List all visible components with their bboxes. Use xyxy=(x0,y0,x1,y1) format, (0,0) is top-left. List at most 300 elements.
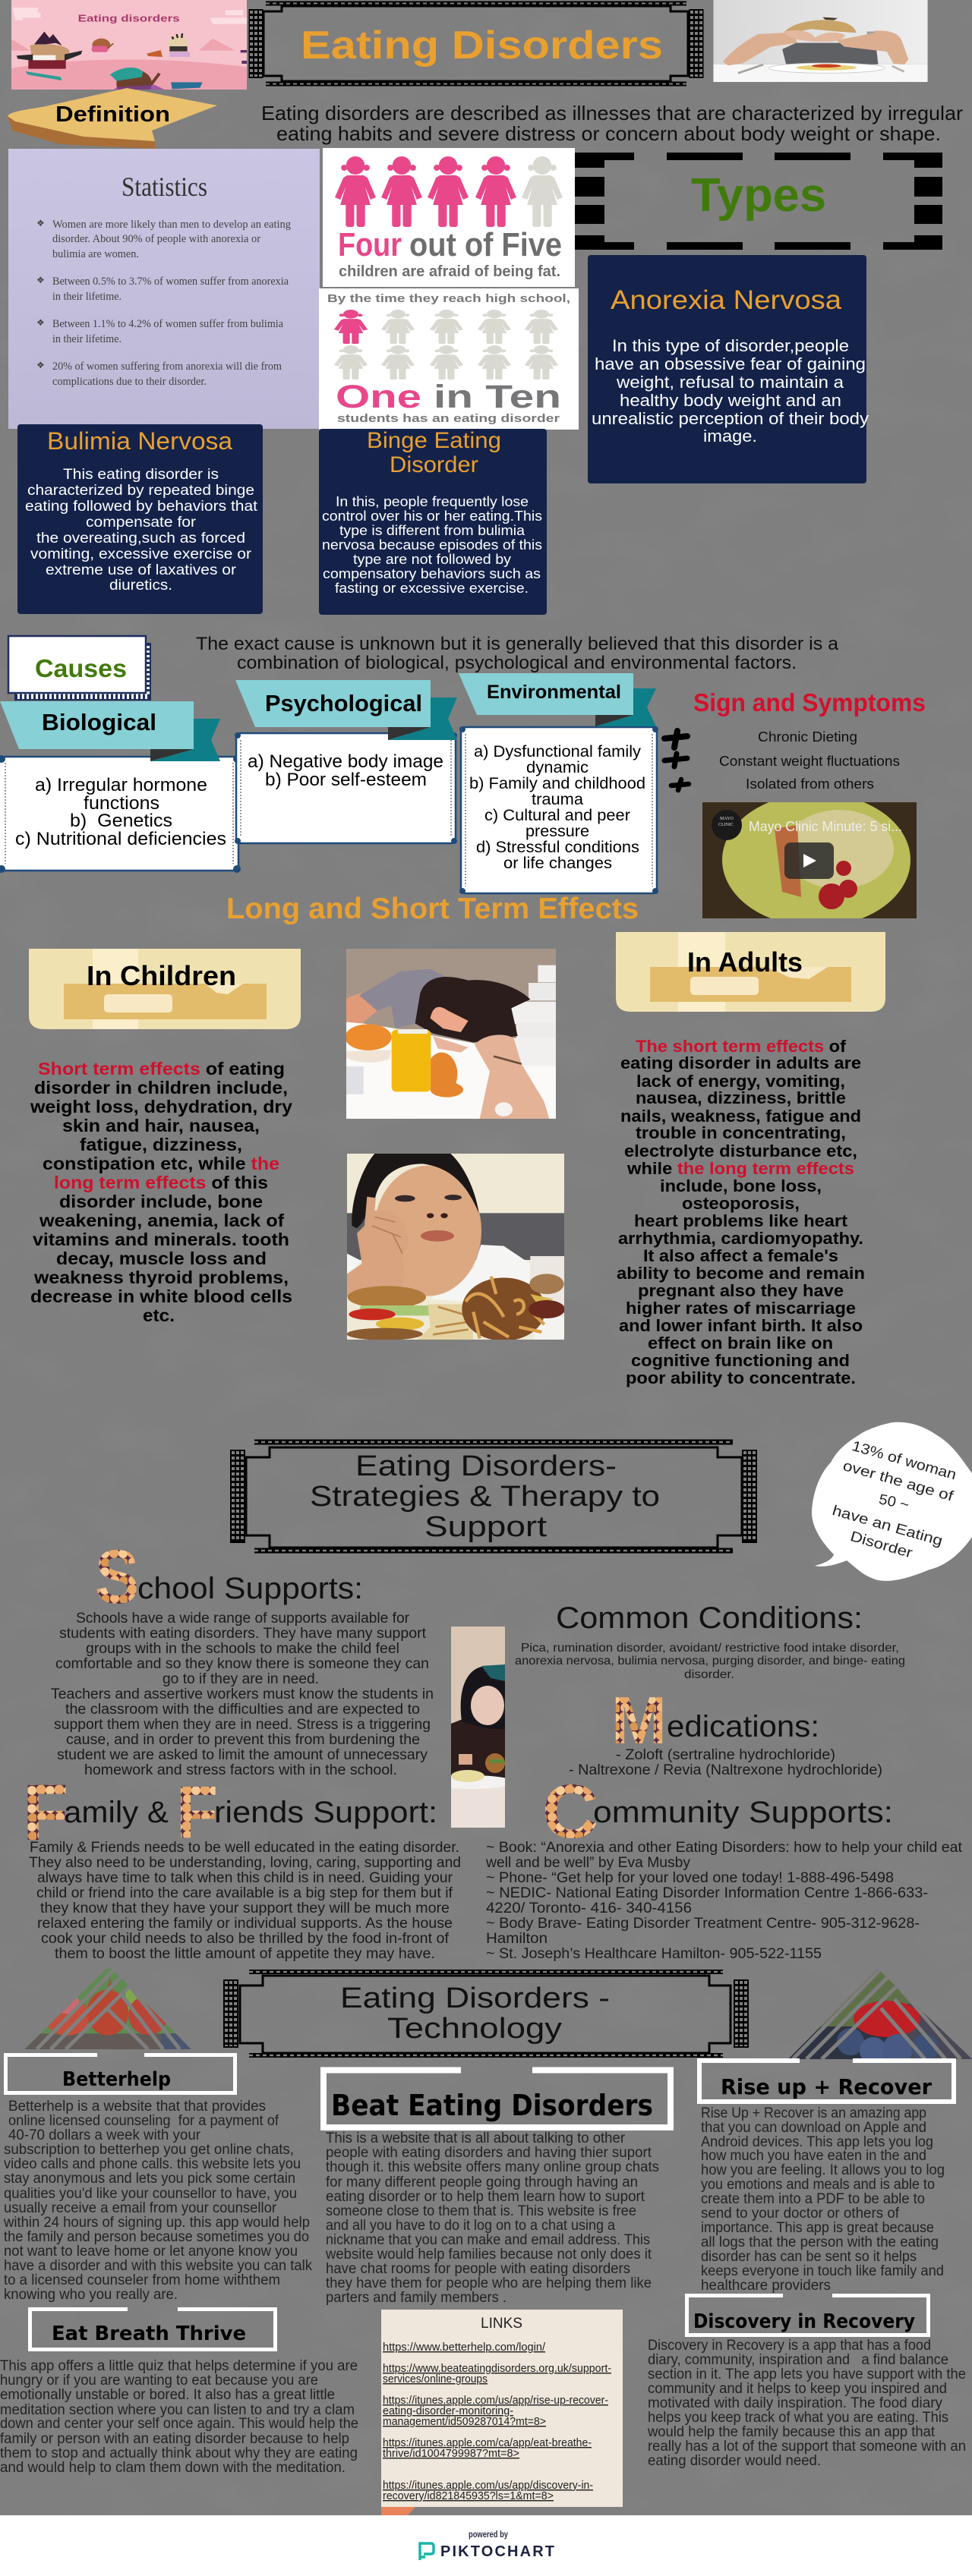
callout: speech bubble: over the age of xyxy=(841,1458,955,1505)
text: environmental factors: b) Family and childhood xyxy=(469,775,645,792)
photo: woman with burger xyxy=(451,1627,505,1828)
text: effects in children xyxy=(30,1059,292,1325)
bullet list: ❖ xyxy=(36,360,45,370)
text: school supports: homework and stress factors with in the school. xyxy=(84,1762,397,1778)
image: cartoon eating disorders: Eating disorders xyxy=(78,13,180,24)
panel: four out of five xyxy=(323,148,575,287)
causes badge xyxy=(8,636,150,700)
pictogram row xyxy=(335,156,563,227)
text: psychological factors: a) Negative body image xyxy=(248,751,443,772)
text: eat breath thrive xyxy=(0,2358,358,2476)
text: psychological factors xyxy=(248,751,443,790)
text: beat eating disorders: This is a website that is all about talking to other xyxy=(326,2130,626,2146)
banner: in children xyxy=(29,949,301,1029)
link list: https://itunes.apple.com/ca/app/eat-breathe- xyxy=(383,2437,592,2449)
text: school supports: the classroom with the difficulties and are expected to xyxy=(65,1702,420,1718)
text: effects in adults: nausea, dizziness, brittle xyxy=(636,1088,846,1107)
pictogram grid xyxy=(334,310,558,379)
text: discovery in recovery: Discovery in Recovery is a app that has a food xyxy=(648,2338,931,2354)
box title: discovery in recovery xyxy=(686,2295,928,2335)
text: biological factors: functions xyxy=(84,793,159,814)
triangle image: apples xyxy=(24,1969,191,2049)
text: school supports: comfortable and so they know there is someone they can xyxy=(55,1656,429,1672)
bullet list: in their lifetime. xyxy=(52,291,122,303)
text: medications: - Naltrexone / Revia (Naltrexone hydrochloride) xyxy=(569,1762,882,1778)
text: rise up and recover: how much you have eaten in the and xyxy=(701,2148,926,2164)
bullet list: Women are more likely than men to develop an eating xyxy=(52,219,291,231)
strategies frame xyxy=(233,1442,754,1551)
bullet list: ❖ xyxy=(36,275,45,285)
text: effects in children: skin and hair, nausea, xyxy=(62,1116,260,1135)
link list xyxy=(383,2341,611,2502)
text: school supports: students with eating disorders. They have many support xyxy=(59,1626,427,1642)
definition badge: Definition xyxy=(55,102,170,127)
panel: bulimia nervosa: Bulimia Nervosa xyxy=(47,427,232,455)
panel: bulimia nervosa: vomiting, excessive exercise or xyxy=(30,546,252,562)
bullet list: ❖ xyxy=(36,317,45,328)
text: betterhelp: have a disorder and with this website you can talk xyxy=(4,2258,312,2274)
panel: bulimia nervosa: the overeating,such as forced xyxy=(36,530,245,546)
panel: links: LINKS xyxy=(481,2316,522,2332)
panel: anorexia nervosa: healthy body weight and an xyxy=(620,391,841,410)
text: common conditions: anorexia nervosa, bulimia nervosa, purging disorder, and binge- eating xyxy=(515,1655,905,1667)
text: betterhelp: usually receive a email from your counsellor xyxy=(4,2200,277,2216)
heading: family and friends support: F xyxy=(176,1771,218,1853)
text: family and friends: they know that they have your support they will be much more xyxy=(40,1901,450,1916)
text: effects in adults: eating disorder in adults are xyxy=(620,1053,861,1072)
text: family and friends: always have time to talk when this child is in need. Guiding your xyxy=(37,1870,453,1886)
link list: https://itunes.apple.com/us/app/discovery-in- xyxy=(383,2480,593,2492)
card: psychological xyxy=(235,680,457,844)
bullet list: complications due to their disorder. xyxy=(52,376,207,388)
panel: one in ten xyxy=(319,288,579,430)
heading: community supports xyxy=(542,1769,893,1854)
callout: speech bubble xyxy=(812,1422,972,1581)
text: effects in adults: It also affect a female's xyxy=(643,1246,838,1265)
panel: one in ten: By the time they reach high school, xyxy=(327,292,570,305)
text: environmental factors: or life changes xyxy=(503,855,612,872)
text: psychological factors: b) Poor self-esteem xyxy=(265,770,427,790)
box title: rise up and recover xyxy=(699,2061,954,2102)
callout: speech bubble: 13% of woman xyxy=(850,1438,958,1483)
ribbon: environmental: Environmental xyxy=(487,682,621,703)
text: community supports: well and be well” by Eva Musby xyxy=(485,1855,690,1871)
text: effects in children: long term effects of this xyxy=(54,1173,268,1192)
text: effects in children: decrease in white blood cells xyxy=(30,1286,292,1306)
bullet list: bulimia are women. xyxy=(52,248,139,260)
panel: links xyxy=(381,2310,623,2515)
card: biological xyxy=(0,701,241,873)
text: effects in adults: pregnant also they have xyxy=(638,1281,844,1300)
heading: strategies and therapy: Strategies & Therapy to xyxy=(310,1481,660,1513)
text: effects in adults: osteoporosis, xyxy=(682,1194,800,1213)
footer: powered by piktochart xyxy=(0,2515,972,2576)
symptoms list xyxy=(664,729,900,792)
panel: anorexia nervosa xyxy=(588,255,869,483)
banner: in children: In Children xyxy=(87,960,236,991)
text: beat eating disorders: eating disorder or to help them learn how to suport xyxy=(326,2189,645,2205)
text: discovery in recovery: section in it. The app lets you have support with the xyxy=(648,2367,966,2382)
panel: one in ten: One xyxy=(336,379,421,415)
text: beat eating disorders: for many different people going through having an xyxy=(326,2174,638,2190)
text: rise up and recover: healthcare providers xyxy=(701,2278,831,2294)
video thumbnail: CLINIC xyxy=(718,823,734,827)
text: environmental factors: pressure xyxy=(525,823,589,840)
text: discovery in recovery: motivated with daily inspiration. The food diary xyxy=(648,2395,942,2411)
text: beat eating disorders xyxy=(325,2130,659,2306)
text: rise up and recover: send to your doctor or others of xyxy=(701,2206,900,2222)
text: rise up and recover: Rise Up + Recover is an amazing app xyxy=(701,2105,926,2121)
text: rise up and recover: create them into a PDF to be able to xyxy=(701,2191,925,2207)
text: family and friends: child or friend into the care available is a big step for them but if xyxy=(36,1885,453,1901)
heading: medications: edications: xyxy=(667,1710,819,1743)
text: rise up and recover: importance. This app is great because xyxy=(701,2220,934,2236)
title frame xyxy=(251,3,701,83)
symptoms list: Isolated from others xyxy=(746,776,874,792)
text: beat eating disorders: and all you have to do it log on to a chat using a xyxy=(326,2218,615,2234)
text: effects in children: decay, muscle loss and xyxy=(56,1249,267,1268)
text: discovery in recovery: diary, community, inspiration and a find balance xyxy=(648,2352,948,2368)
panel: bulimia nervosa: extreme use of laxatives or xyxy=(46,562,237,578)
panel: binge eating disorder: Disorder xyxy=(390,452,478,477)
box title: eat breath thrive xyxy=(30,2309,275,2350)
text: family and friends xyxy=(29,1840,461,1962)
text: beat eating disorders: they have them for people who are helping them like xyxy=(326,2275,652,2291)
box title: eat breath thrive: Eat Breath Thrive xyxy=(52,2322,246,2345)
panel: bulimia nervosa: characterized by repeated binge xyxy=(27,482,254,499)
text: common conditions xyxy=(515,1642,905,1681)
text: betterhelp: to a licensed counseler from home withthem xyxy=(4,2272,280,2288)
link list: management/id509287014?mt=8> xyxy=(383,2416,546,2428)
panel: anorexia nervosa: unrealistic perception of their body xyxy=(592,409,869,428)
text: rise up and recover: how you are feeling. It allows you to log xyxy=(701,2162,945,2178)
text: family and friends: relaxed entering the family or individual supports. As the house xyxy=(37,1916,453,1932)
text: family and friends: They also need to be understanding, loving, caring, supporting and xyxy=(29,1855,461,1871)
text: family and friends: Family & Friends needs to be well educated in the eating disorder. xyxy=(30,1840,459,1856)
video thumbnail: Mayo Clinic Minute: 5 si... xyxy=(749,819,902,834)
photo: tired woman with junk food xyxy=(346,949,556,1119)
text: beat eating disorders: someone close to them that is. This website is free xyxy=(326,2203,636,2219)
definition text: eating habits and severe distress or concern about body weight or shape. xyxy=(276,122,941,145)
text: betterhelp: Betterhelp is a website that that provides xyxy=(8,2099,266,2115)
bullet list: in their lifetime. xyxy=(52,333,122,345)
panel: anorexia nervosa: Anorexia Nervosa xyxy=(611,285,842,315)
text: beat eating disorders: though it. this website offers many online group chats xyxy=(326,2159,659,2175)
text: effects in children: etc. xyxy=(143,1305,175,1325)
text: school supports: go to if they are in need. xyxy=(163,1671,319,1687)
heading: family and friends support xyxy=(23,1768,437,1857)
link list: eating-disorder-monitoring- xyxy=(383,2405,513,2417)
text: effects in adults: nails, weakness, fatigue and xyxy=(620,1107,861,1126)
ribbon: biological: Biological xyxy=(42,709,156,735)
footer: powered by piktochart: PIKTOCHART xyxy=(440,2543,554,2560)
text: effects in adults: effect on brain like on xyxy=(648,1334,833,1353)
text: betterhelp: knowing who you really are. xyxy=(4,2287,178,2303)
heading: strategies and therapy xyxy=(310,1450,660,1543)
heading: technology: Technology xyxy=(387,2013,562,2045)
text: environmental factors: dynamic xyxy=(526,759,589,776)
panel: binge eating disorder: Binge Eating xyxy=(367,428,501,453)
link list: thrive/id1004799987?mt=8> xyxy=(383,2448,519,2460)
definition badge xyxy=(8,88,217,149)
text: school supports: Teachers and assertive workers must know the students in xyxy=(51,1686,434,1702)
bullet list: 20% of women suffering from anorexia will die from xyxy=(52,361,282,373)
text: common conditions: disorder. xyxy=(684,1668,734,1681)
text: rise up and recover: that you can download on Apple and xyxy=(701,2120,926,2136)
panel: one in ten: students has an eating disorder xyxy=(337,412,560,425)
heading: strategies and therapy: Eating Disorders- xyxy=(355,1450,617,1482)
definition text: Eating disorders are described as illnesses that are characterized by irregular xyxy=(261,102,963,124)
box title: beat eating disorders xyxy=(323,2071,671,2127)
text: discovery in recovery: helps you keep track of what you are eating. This xyxy=(648,2410,948,2426)
text: family and friends: cook your child needs to also be thrilled by the food in-front of xyxy=(41,1931,450,1947)
box title: beat eating disorders: Beat Eating Disorders xyxy=(331,2089,653,2122)
text: environmental factors: a) Dysfunctional family xyxy=(474,743,642,761)
text: community supports: ~ Phone- “Get help for your loved one today! 1-888-496-5498 xyxy=(486,1870,894,1886)
text: medications xyxy=(569,1747,882,1778)
heading: technology xyxy=(340,1982,610,2045)
text: effects in children: constipation etc, while the xyxy=(43,1154,279,1173)
banner: in adults xyxy=(616,932,885,1012)
text: discovery in recovery xyxy=(647,2338,966,2469)
text: beat eating disorders: people with eating disorders and having thier suport xyxy=(326,2145,652,2161)
types frame xyxy=(575,153,942,250)
box title: rise up and recover: Rise up + Recover xyxy=(721,2074,932,2099)
text: effects in children: Short term effects of eating xyxy=(38,1059,285,1079)
text: betterhelp: qualities you'd like your counsellor to have, you xyxy=(4,2186,297,2202)
heading: common conditions: Common Conditions: xyxy=(556,1601,863,1635)
text: betterhelp xyxy=(3,2099,312,2303)
text: effects in adults: lack of energy, vomiting, xyxy=(636,1072,845,1091)
link list: https://itunes.apple.com/us/app/rise-up-recover- xyxy=(383,2395,608,2407)
bullet list: Between 1.1% to 4.2% of women suffer from bulimia xyxy=(52,318,283,330)
box title: betterhelp xyxy=(6,2055,235,2093)
panel: four out of five: out of Five xyxy=(409,226,562,263)
text: school supports: student we are asked to limit the amount of unnecessary xyxy=(57,1747,428,1763)
text: rise up and recover: all logs that the person with the eating xyxy=(701,2234,939,2250)
text: school supports: groups with in the schools to make the child feel xyxy=(86,1641,399,1657)
text: community supports: 4220/ Toronto- 416- 340-4156 xyxy=(486,1901,692,1916)
card: environmental xyxy=(459,673,658,894)
ribbon: biological xyxy=(0,701,220,761)
text: eat breath thrive: and would help to clam them down with the meditation. xyxy=(0,2460,346,2476)
text: eat breath thrive: emotionally unstable or bored. It also has a great little xyxy=(0,2387,335,2403)
text: eat breath thrive: down and center your self once again. This would help the xyxy=(0,2416,358,2432)
definition text xyxy=(261,102,963,145)
causes intro text: combination of biological, psychological and environmental factors. xyxy=(237,653,797,673)
bullet list: Between 0.5% to 3.7% of women suffer from anorexia xyxy=(52,276,289,288)
text: betterhelp: not want to leave home or let anyone know you xyxy=(4,2244,298,2260)
text: beat eating disorders: website would help families because not only does it xyxy=(325,2247,652,2263)
text: community supports xyxy=(485,1840,963,1962)
technology frame xyxy=(226,1972,746,2055)
text: eat breath thrive: hungry or if you are wanting to eat because you are xyxy=(0,2373,318,2389)
text: discovery in recovery: would help the family because this an app that xyxy=(647,2424,936,2440)
video thumbnail xyxy=(702,802,917,918)
text: effects in adults: while the long term effects xyxy=(626,1159,854,1178)
text: betterhelp: video calls and phone calls. this website lets you xyxy=(4,2156,301,2172)
link list: https://www.beateatingdisorders.org.uk/support- xyxy=(383,2363,611,2375)
ribbon: psychological: Psychological xyxy=(265,690,422,716)
symptoms list: Chronic Dieting xyxy=(758,729,857,745)
panel: bulimia nervosa: diuretics. xyxy=(109,577,172,594)
text: community supports: Hamilton xyxy=(486,1931,548,1947)
text: effects in children: weight loss, dehydration, dry xyxy=(30,1097,292,1116)
box title: betterhelp: Betterhelp xyxy=(62,2068,171,2091)
text: school supports: Schools have a wide range of supports available for xyxy=(76,1611,410,1627)
panel: bulimia nervosa: This eating disorder is xyxy=(63,466,219,483)
banner: in adults: In Adults xyxy=(687,946,803,978)
text: effects in adults: arrhythmia, cardiomyopathy. xyxy=(618,1229,863,1248)
text: community supports: ~ NEDIC- National Eating Disorder Information Centre 1-866-633- xyxy=(486,1885,928,1901)
text: environmental factors: trauma xyxy=(532,791,583,808)
text: eat breath thrive: This app offers a little quiz that helps determine if you are xyxy=(0,2358,358,2374)
text: biological factors: b) Genetics xyxy=(70,811,172,831)
text: community supports: ~ St. Joseph’s Healthcare Hamilton- 905-522-1155 xyxy=(486,1946,822,1962)
text: school supports: support them when they are in need. Stress is a triggering xyxy=(54,1717,431,1733)
heading: school supports xyxy=(95,1535,363,1620)
panel: anorexia nervosa: have an obsessive fear of gaining xyxy=(595,354,866,373)
text: betterhelp: within 24 hours of signing up. this app would help xyxy=(3,2215,310,2231)
panel: one in ten: in Ten xyxy=(434,379,561,415)
heading: statistics: Statistics xyxy=(122,172,207,202)
text: effects in children: disorder include, bone xyxy=(59,1192,263,1211)
panel: binge eating disorder: fasting or excessive exercise. xyxy=(335,581,529,596)
text: rise up and recover: disorder has can be sent so it helps xyxy=(701,2249,917,2265)
panel: bulimia nervosa xyxy=(17,424,263,614)
panel: binge eating disorder: nervosa because episodes of this xyxy=(322,537,542,553)
heading: community supports: ommunity Supports: xyxy=(593,1796,893,1829)
panel: four out of five: children are afraid of being fat. xyxy=(339,263,560,280)
text: effects in children: vitamins and minerals. tooth xyxy=(33,1230,289,1249)
photo: boy with fast food xyxy=(347,1154,564,1340)
text: environmental factors: c) Cultural and peer xyxy=(484,807,630,824)
text: effects in children: weakening, anemia, lack of xyxy=(39,1211,284,1230)
text: beat eating disorders: nickname that you can make and email address. This xyxy=(326,2232,650,2248)
image: woman with plate xyxy=(713,0,928,82)
text: effects in children: fatigue, dizziness, xyxy=(80,1135,242,1154)
bullet list: disorder. About 90% of people with anorexia or xyxy=(52,233,260,245)
heading: sign and symptoms: Sign and Symptoms xyxy=(693,688,926,716)
text: effects in adults: ability to become and remain xyxy=(617,1264,865,1283)
heading: long and short term effects: Long and Short Term Effects xyxy=(226,893,639,925)
heading: medications xyxy=(611,1683,819,1758)
text: discovery in recovery: really has a lot of the support that someone with an xyxy=(648,2439,966,2455)
text: effects in adults: electrolyte disturbance etc, xyxy=(624,1142,857,1160)
panel: statistics slide xyxy=(8,149,320,429)
text: betterhelp: the family and person because sometimes you do xyxy=(4,2229,309,2245)
text: community supports: ~ Book: “Anorexia and other Eating Disorders: how to help your child eat xyxy=(486,1840,963,1856)
panel: binge eating disorder: type is different from bulimia xyxy=(339,523,525,538)
text: school supports: cause, and in order to prevent this from burdening the xyxy=(66,1732,420,1748)
box title: discovery in recovery: Discovery in Recovery xyxy=(693,2310,915,2333)
text: effects in adults: include, bone loss, xyxy=(660,1176,822,1195)
causes intro text: The exact cause is unknown but it is generally believed that this disorder is a xyxy=(196,634,839,654)
link list: https://www.betterhelp.com/login/ xyxy=(383,2341,546,2354)
causes intro text xyxy=(196,634,839,673)
text: biological factors: a) Irregular hormone xyxy=(35,775,207,795)
text: family and friends: them to boost the little amount of appetite they may have. xyxy=(55,1946,435,1962)
callout: speech bubble: have an Eating xyxy=(831,1503,945,1549)
panel: bulimia nervosa: compensate for xyxy=(86,514,197,531)
stat text: Four xyxy=(338,226,402,263)
text: discovery in recovery: community and it helps to keep you inspired and xyxy=(648,2381,947,2397)
text: betterhelp: online licensed counseling for a payment of xyxy=(8,2113,279,2129)
text: effects in adults: higher rates of miscarriage xyxy=(626,1299,856,1318)
ribbon: psychological xyxy=(235,680,457,740)
panel: binge eating disorder: control over his or her eating.This xyxy=(322,509,542,524)
heading: medications: M xyxy=(611,1683,667,1758)
text: effects in adults: poor ability to concentrate. xyxy=(626,1368,856,1387)
text: rise up and recover: keeps everyone in touch like family and xyxy=(701,2263,944,2279)
triangle image: berries xyxy=(788,1969,972,2064)
heading: family and friends support: riends Support: xyxy=(214,1796,437,1829)
text: beat eating disorders: parters and family members . xyxy=(326,2290,507,2306)
panel: binge eating disorder xyxy=(319,428,547,615)
text: environmental factors: d) Stressful conditions xyxy=(476,839,639,856)
panel: anorexia nervosa: In this type of disorder,people xyxy=(612,336,849,355)
video thumbnail: MAYO xyxy=(720,817,734,821)
panel: binge eating disorder: type are not followed by xyxy=(353,552,511,567)
text: eat breath thrive: meditation section where you can listen to and try a clam xyxy=(0,2402,355,2418)
heading: family and friends support: F xyxy=(23,1768,68,1857)
heading: technology: Eating Disorders - xyxy=(340,1982,610,2014)
heading: community supports: C xyxy=(542,1769,598,1854)
text: rise up and recover: you emotions and meals and is able to xyxy=(701,2177,935,2193)
text: environmental factors xyxy=(469,743,645,872)
ribbon: environmental xyxy=(459,673,656,726)
text: effects in adults xyxy=(617,1037,865,1387)
text: beat eating disorders: have chat rooms for people with eating disorders xyxy=(326,2261,630,2277)
text: betterhelp: subscription to betterhep you get online chats, xyxy=(4,2142,294,2158)
text: effects in adults: heart problems like heart xyxy=(634,1211,848,1230)
causes badge: Causes xyxy=(35,654,127,682)
panel: binge eating disorder: compensatory behaviors such as xyxy=(323,566,541,581)
bullet list: ❖ xyxy=(36,218,45,228)
text: eat breath thrive: family or person with an eating disorder because to help xyxy=(0,2431,349,2447)
text: effects in adults: cognitive functioning and xyxy=(631,1351,850,1370)
callout: speech bubble: 50 ~ xyxy=(877,1491,910,1513)
text: school supports xyxy=(51,1611,434,1778)
panel: bulimia nervosa: eating followed by behaviors that xyxy=(25,498,258,515)
footer: powered by piktochart: powered by xyxy=(469,2529,508,2540)
text: effects in adults: The short term effects of xyxy=(636,1037,847,1056)
heading: strategies and therapy: Support xyxy=(424,1511,548,1543)
text: effects in children: disorder in children include, xyxy=(34,1078,288,1097)
symptoms list: Constant weight fluctuations xyxy=(719,754,900,769)
text: effects in children: weakness thyroid problems, xyxy=(33,1268,289,1287)
text: discovery in recovery: eating disorder would need. xyxy=(648,2453,821,2469)
heading: school supports: chool Supports: xyxy=(137,1572,363,1605)
text: medications: - Zoloft (sertraline hydrochloride) xyxy=(616,1747,835,1763)
callout: speech bubble: Disorder xyxy=(848,1529,915,1562)
link list: services/online-groups xyxy=(383,2373,488,2385)
title: Eating Disorders xyxy=(301,24,663,68)
text: effects in adults: and lower infant birth. It also xyxy=(619,1316,863,1335)
heading: family and friends support: amily & xyxy=(64,1796,169,1829)
text: rise up and recover: Android devices. This app lets you log xyxy=(701,2134,933,2150)
heading: school supports: S xyxy=(95,1535,139,1620)
heading: types: Types xyxy=(691,169,826,222)
text: community supports: ~ Body Brave- Eating Disorder Treatment Centre- 905-312-9628- xyxy=(486,1916,920,1932)
text: effects in adults: trouble in concentrating, xyxy=(636,1123,846,1142)
text: betterhelp: 40-70 dollars a week with your xyxy=(8,2127,201,2143)
text: eat breath thrive: them to stop and actually think about why they are eating xyxy=(0,2445,358,2461)
bullet list xyxy=(36,218,291,388)
panel: binge eating disorder: In this, people frequently lose xyxy=(336,494,529,509)
text: rise up and recover xyxy=(701,2105,945,2294)
link list: recovery/id821845935?ls=1&mt=8> xyxy=(383,2490,554,2502)
